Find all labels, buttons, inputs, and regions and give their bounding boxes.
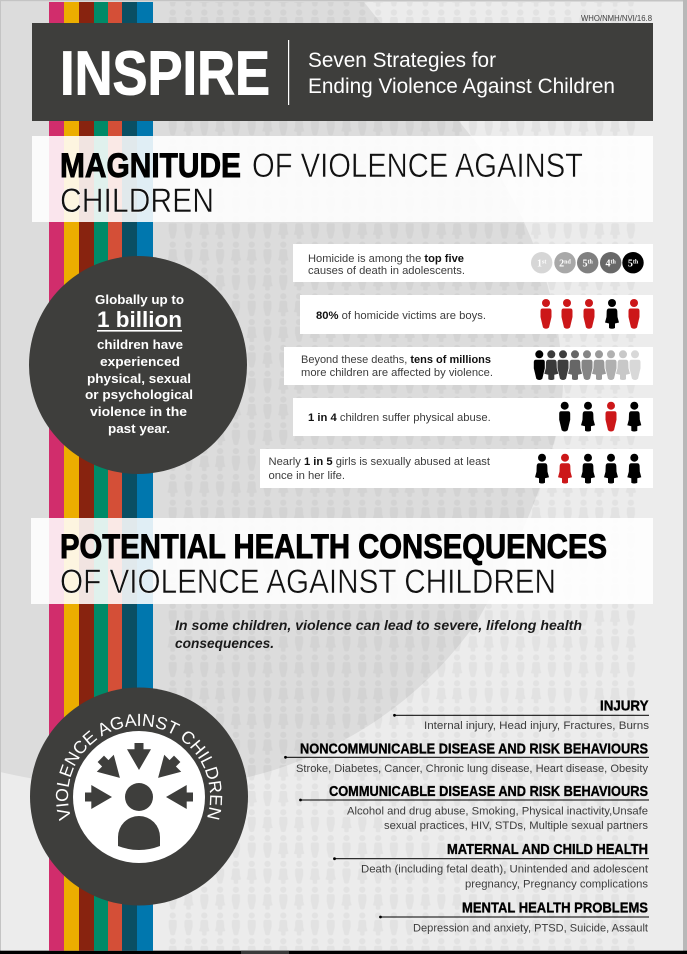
heading: potential health consequences: POTENTIAL HEALTH CONSEQUENCES — [60, 528, 607, 566]
stat row: physical abuse: 1 in 4 children suffer physical abuse. — [308, 412, 491, 424]
rank badges: th — [588, 260, 594, 266]
consequence: communicable disease: sexual practices, HIV, STDs, Multiple sexual partners — [384, 820, 649, 832]
consequence: mental health problems — [379, 900, 649, 935]
heading: magnitude: OF VIOLENCE AGAINST — [252, 147, 583, 185]
consequence: noncommunicable disease: Stroke, Diabetes, Cancer, Chronic lung disease, Heart disease, Obesity — [296, 763, 648, 775]
consequence: maternal and child health: pregnancy, Pregnancy complications — [465, 878, 649, 890]
rank badges — [531, 252, 644, 273]
callout: 1 billion children: 1 billion — [97, 307, 182, 332]
callout: 1 billion children: experienced — [100, 355, 180, 369]
stat row: tens of millions: more children are affected by violence. — [301, 367, 493, 379]
rank badges: th — [611, 260, 617, 266]
rank badges: 5 — [583, 258, 588, 270]
title banner — [32, 23, 653, 121]
stat row: tens of millions — [284, 347, 653, 385]
consequence: communicable disease: Alcohol and drug abuse, Smoking, Physical inactivity,Unsafe — [347, 806, 648, 818]
consequence: maternal and child health: Death (including fetal death), Unintended and adolescent — [361, 864, 648, 876]
heading: magnitude: MAGNITUDE — [60, 147, 241, 185]
stat row: sexual abuse: Nearly 1 in 5 girls is sexually abused at least — [268, 456, 490, 468]
icon: child — [118, 783, 160, 850]
consequence: noncommunicable disease — [284, 741, 649, 775]
consequence: injury: INJURY — [600, 699, 649, 715]
intro sentence: In some children, violence can lead to severe, lifelong health — [175, 617, 582, 633]
consequence: mental health problems: Depression and anxiety, PTSD, Suicide, Assault — [413, 923, 648, 935]
consequence: communicable disease: COMMUNICABLE DISEASE AND RISK BEHAVIOURS — [329, 784, 648, 800]
heading: potential health consequences: OF VIOLENCE AGAINST CHILDREN — [60, 563, 556, 601]
consequence: noncommunicable disease: NONCOMMUNICABLE DISEASE AND RISK BEHAVIOURS — [300, 741, 648, 757]
subtitle: Ending Violence Against Children — [308, 75, 615, 98]
document code: WHO/NMH/NVI/16.8 — [581, 14, 653, 23]
subtitle: Seven Strategies for — [308, 49, 496, 72]
callout: 1 billion children: past year. — [108, 422, 170, 436]
intro sentence: consequences. — [175, 635, 274, 651]
subtitle — [308, 49, 615, 98]
stat row: homicide victims: 80% of homicide victims are boys. — [316, 310, 486, 322]
callout: 1 billion children — [29, 256, 247, 474]
emblem ring text: VIOLENCE AGAINST CHILDREN — [56, 714, 222, 822]
colour stripes — [49, 2, 153, 951]
consequence: communicable disease — [299, 784, 649, 832]
heading: magnitude — [32, 136, 653, 222]
pictogram: one in four — [559, 402, 641, 431]
pictogram: one in five girls — [535, 454, 641, 483]
icon: arrows pointing at child — [85, 743, 193, 809]
stat row: top five causes: Homicide is among the top five — [308, 253, 464, 265]
title: INSPIRE: INSPIRE — [60, 40, 270, 108]
stat row: tens of millions: Beyond these deaths, tens of millions — [301, 354, 491, 366]
stat row: top five causes — [293, 244, 653, 282]
stat row: sexual abuse — [260, 449, 653, 488]
pictogram: fading children — [534, 350, 640, 380]
intro sentence — [175, 617, 582, 651]
consequence: mental health problems: MENTAL HEALTH PROBLEMS — [462, 900, 648, 916]
consequence: maternal and child health — [333, 842, 649, 890]
stat row: sexual abuse: once in her life. — [268, 470, 345, 482]
rank badges: th — [633, 260, 639, 266]
callout: 1 billion children: physical, sexual — [87, 372, 191, 386]
callout: 1 billion children: violence in the — [90, 405, 187, 419]
rank badges: nd — [564, 260, 571, 266]
heading: magnitude: CHILDREN — [60, 182, 214, 220]
stat row: top five causes: causes of death in adolescents. — [308, 265, 465, 277]
stat row: physical abuse — [293, 398, 653, 436]
pictogram: four boys of five — [540, 299, 640, 329]
stat row: homicide victims — [300, 295, 653, 334]
consequence: maternal and child health: MATERNAL AND CHILD HEALTH — [447, 842, 648, 858]
emblem: violence against children — [30, 688, 248, 906]
callout: 1 billion children: Globally up to — [95, 293, 184, 307]
consequence: injury — [393, 699, 650, 732]
rank badges: 5 — [628, 258, 633, 270]
callout: 1 billion children: children have — [97, 338, 183, 352]
rank badges: 4 — [606, 258, 611, 270]
callout: 1 billion children: or psychological — [85, 388, 193, 402]
rank badges: 1 — [537, 258, 542, 270]
consequence: injury: Internal injury, Head injury, Fractures, Burns — [424, 720, 650, 732]
rank badges: st — [542, 260, 546, 266]
heading: potential health consequences — [31, 518, 653, 604]
rank badges: 2 — [559, 258, 564, 270]
